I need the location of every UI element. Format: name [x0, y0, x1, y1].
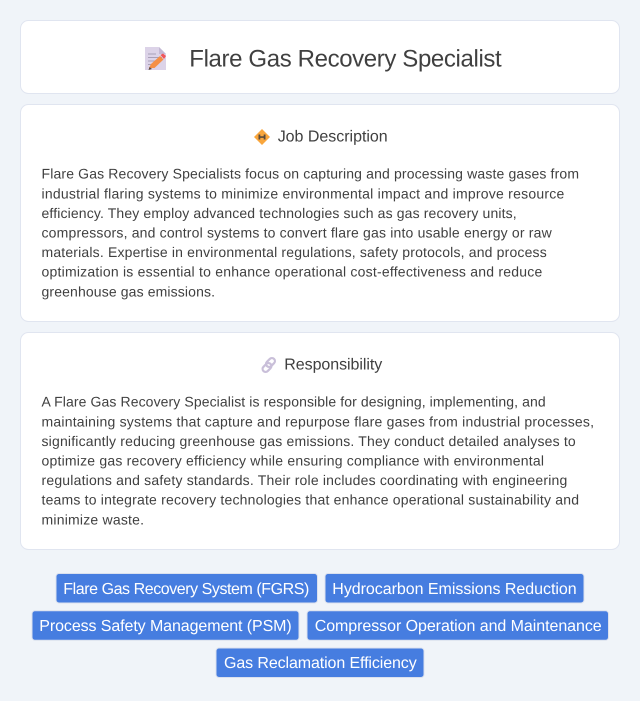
tag: flare gas recovery system: [56, 574, 318, 603]
panel: job description: [20, 104, 620, 322]
text block: responsibility: teams to integrate recovery technologies that enhance operational sustainability and: [42, 492, 579, 508]
tag: flare gas recovery system: Flare Gas Recovery System (FGRS): [63, 581, 309, 598]
text block: job description: [42, 166, 579, 299]
heading: job description: Job Description: [278, 128, 388, 146]
heading: responsibility: Responsibility: [284, 356, 382, 374]
panel: responsibility: [20, 332, 620, 550]
text block: responsibility: regulations and safety standards. Their role includes coordinating with engineering: [42, 472, 567, 488]
tag: gas reclamation efficiency: Gas Reclamation Efficiency: [224, 655, 417, 672]
text block: job description: Flare Gas Recovery Specialists focus on capturing and processing waste gases from: [42, 166, 579, 182]
title: Flare Gas Recovery Specialist: [189, 46, 502, 72]
icon: chain link: [261, 357, 276, 373]
text block: job description: efficiency. They employ advanced technologies such as gas recovery units,: [42, 205, 517, 221]
tag: process safety management: [32, 611, 299, 640]
text block: responsibility: [42, 394, 594, 527]
icon: puzzle diamond: [254, 129, 270, 145]
text block: responsibility: optimize gas recovery efficiency while ensuring compliance with environmental: [42, 452, 544, 468]
panel: title card: [20, 20, 620, 94]
tag: compressor operation and maintenance: [307, 611, 608, 640]
text block: responsibility: maintaining systems that capture and repurpose flare gases from industrial processes,: [42, 413, 594, 429]
tag: hydrocarbon emissions reduction: [325, 574, 584, 603]
text block: job description: greenhouse gas emissions.: [42, 283, 215, 299]
text block: job description: compressors, and control systems to convert flare gas into usable energy or raw: [42, 224, 553, 240]
tag: compressor operation and maintenance: Compressor Operation and Maintenance: [315, 618, 602, 635]
text block: responsibility: minimize waste.: [42, 511, 144, 527]
text block: job description: materials. Expertise in environmental regulations, safety protocols, and process: [42, 244, 547, 260]
icon: memo with pencil: [145, 47, 166, 70]
tag: process safety management: Process Safety Management (PSM): [39, 618, 292, 635]
text block: responsibility: A Flare Gas Recovery Specialist is responsible for designing, implementing, and: [42, 394, 546, 410]
tag: hydrocarbon emissions reduction: Hydrocarbon Emissions Reduction: [332, 581, 577, 598]
text block: job description: optimization is essential to enhance operational cost-effectiveness and reduce: [42, 264, 543, 280]
tag: gas reclamation efficiency: [216, 648, 424, 678]
text block: job description: industrial flaring systems to minimize environmental impact and improve resource: [42, 185, 565, 201]
text block: responsibility: significantly reducing greenhouse gas emissions. They conduct detailed analyses to: [42, 433, 576, 449]
